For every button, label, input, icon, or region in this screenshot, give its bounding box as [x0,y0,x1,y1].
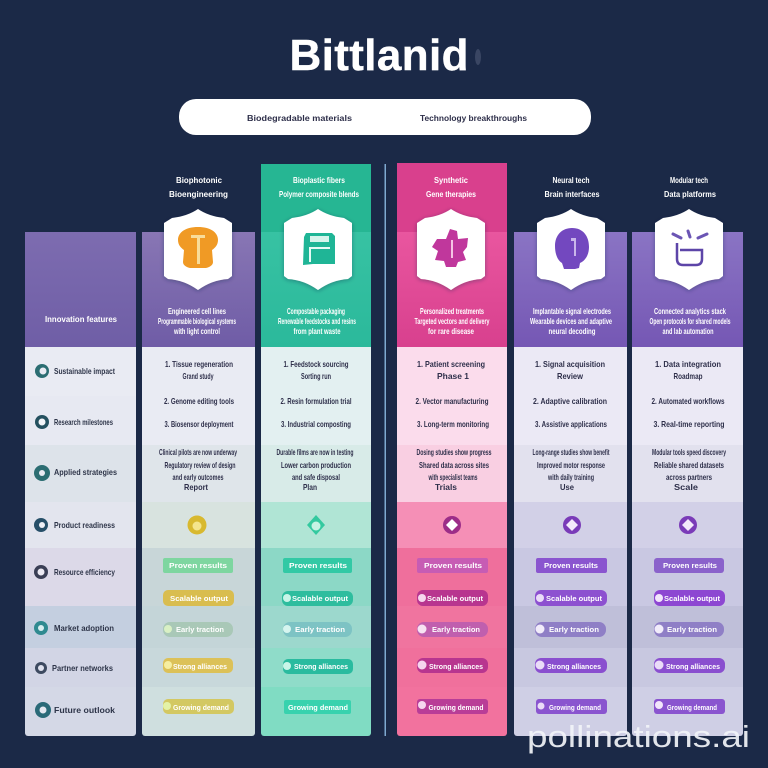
row label 8 [35,702,115,718]
tag pills: Scalable output [170,596,229,603]
body text: with daily training [547,472,594,482]
body text: Trials [435,482,457,492]
column heading: Brain interfaces [544,189,600,199]
tag pills: Growing demand [549,705,601,712]
tag pills: Growing demand [667,705,717,712]
body text [276,359,354,492]
tag pills: Growing demand [288,705,348,712]
tag pills [654,558,725,714]
body text: and safe disposal [292,472,340,482]
status icon [307,515,325,535]
body text: and early outcomes [172,472,224,482]
row label 6: Market adoption [54,623,114,633]
row label 7 [35,662,113,674]
tag pills: Early traction [667,627,717,634]
body text: across partners [666,472,712,482]
body text: Report [184,482,208,492]
body text [159,359,237,492]
body text: Regulatory review of design [164,460,236,470]
body text: Durable films are now in testing [276,447,354,457]
header description: Targeted vectors and delivery [414,316,490,326]
header description: Programmable biological systems [158,316,236,326]
tag pills [282,558,353,714]
tag pills: Strong alliances [666,664,720,671]
row label 5 [34,565,115,579]
panel: indigo column [632,175,743,736]
body text: 3. Real-time reporting [654,419,724,429]
column heading [426,175,476,199]
status icon [563,516,581,534]
column heading: Modular tech [670,175,708,185]
row label 4: Product readiness [54,520,115,530]
tag pills: Proven results [289,563,347,570]
column heading: Polymer composite blends [279,189,359,199]
hexagon icon: pink [417,209,485,290]
header description [530,306,612,336]
body text: 1. Patient screening [417,359,485,369]
tag pills [417,558,488,714]
body text: Reliable shared datasets [654,460,724,470]
body text: Grand study [182,371,214,381]
subtitle pill: Technology breakthroughs [420,113,527,123]
status icon [188,516,206,534]
tag pills: Proven results [169,563,227,570]
tag pills: Early traction [549,627,599,634]
tag pills: Strong alliances [429,664,483,671]
tag pills: Growing demand [428,705,484,712]
body text: 1. Data integration [655,359,721,369]
row label 1: Sustainable impact [54,366,115,376]
column heading [544,175,600,199]
row label 6 [34,621,114,635]
tag pills: Early traction [176,627,224,634]
row label 7: Partner networks [52,663,113,673]
panel: teal column [261,164,371,736]
body text: Lower carbon production [281,460,351,470]
tag pills: Strong alliances [294,664,348,671]
body text: 3. Biosensor deployment [164,419,234,429]
body text: 2. Vector manufacturing [416,396,488,406]
header description [414,306,490,336]
header description: Compostable packaging [287,306,345,316]
body text: 3. Industrial composting [281,419,351,429]
tag pills: Scalable output [664,596,721,603]
column heading [169,175,228,199]
tag pills: Proven results [663,563,717,570]
body text: Dosing studies show progress [416,447,492,457]
column heading: Bioplastic fibers [293,175,345,185]
body text: Review [557,371,583,381]
header description: Personalized treatments [420,306,484,316]
body text: 2. Genome editing tools [164,396,234,406]
header description: and lab automation [662,326,714,336]
tag pills: Strong alliances [547,664,601,671]
header description: Renewable feedstocks and resins [278,316,356,326]
body text: Plan [303,482,317,492]
column heading: Biophotonic [176,175,222,185]
tag pills [163,558,234,714]
row label 2: Research milestones [54,417,113,427]
column heading: Bioengineering [169,189,228,199]
hexagon icon: orange [164,209,232,290]
body text: 1. Signal acquisition [535,359,605,369]
body text: 3. Long-term monitoring [417,419,489,429]
header description: for rare disease [428,326,474,336]
row label 3 [34,465,117,481]
panel: orange column [142,175,255,736]
hexagon icon: indigo [655,209,723,290]
header description: neural decoding [548,326,596,336]
column heading [279,175,359,199]
header description [278,306,356,336]
row label 5: Resource efficiency [54,567,115,577]
row label 4 [34,518,115,532]
header description [650,306,731,336]
body text: 2. Automated workflows [652,396,725,406]
body text: Shared data across sites [419,460,489,470]
header description: from plant waste [294,326,341,336]
header description: Wearable devices and adaptive [530,316,612,326]
panel: row labels [25,232,136,736]
title: Bittlanid [290,31,468,80]
watermark: pollinations.ai [527,719,750,754]
column heading [664,175,716,199]
header description: Engineered cell lines [168,306,226,316]
tag pills: Scalable output [292,596,349,603]
hexagon icon: violet [537,209,605,290]
tag pills: Scalable output [546,596,603,603]
body text: Use [560,482,574,492]
column heading: Synthetic [434,175,468,185]
body text: Roadmap [674,371,702,381]
header description: Implantable signal electrodes [533,306,611,316]
tag pills: Proven results [424,563,482,570]
panel: pink column [397,163,507,736]
status icon [443,516,461,534]
row label 2 [35,415,113,429]
subtitle pill: Biodegradable materials [247,113,352,123]
row label 1 [35,364,115,378]
body text: Scale [674,482,698,492]
body text: 1. Tissue regeneration [165,359,233,369]
body text [532,359,610,492]
row label 3: Applied strategies [54,467,117,477]
status icon [679,516,697,534]
tag pills: Proven results [544,563,598,570]
column divider line [384,164,386,736]
body text [416,359,492,492]
tag pills: Strong alliances [173,664,227,671]
body text: Long-range studies show benefit [532,447,610,457]
hexagon icon: teal [284,209,352,290]
subtitle pill [179,99,591,135]
header description: Connected analytics stack [654,306,726,316]
tag pills: Early traction [295,627,345,634]
body text: 1. Feedstock sourcing [284,359,348,369]
header description [158,306,236,336]
body text: Clinical pilots are now underway [159,447,237,457]
body text [652,359,726,492]
tag pills: Growing demand [173,705,229,712]
label header text: Innovation features [45,314,117,324]
body text: with specialist teams [428,472,478,482]
column heading: Gene therapies [426,189,476,199]
tag pills: Early traction [432,627,480,634]
body text: 2. Resin formulation trial [280,396,352,406]
header description: with light control [173,326,220,336]
body text: Improved motor response [537,460,605,470]
tag pills [535,558,607,714]
column heading: Data platforms [664,189,716,199]
column heading: Neural tech [552,175,590,185]
row label 8: Future outlook [54,705,115,715]
panel: violet column [514,175,627,736]
body text: 3. Assistive applications [535,419,607,429]
body text: 2. Adaptive calibration [533,396,607,406]
body text: Phase 1 [437,371,469,381]
body text: Sorting run [301,371,331,381]
tag pills: Scalable output [427,596,484,603]
